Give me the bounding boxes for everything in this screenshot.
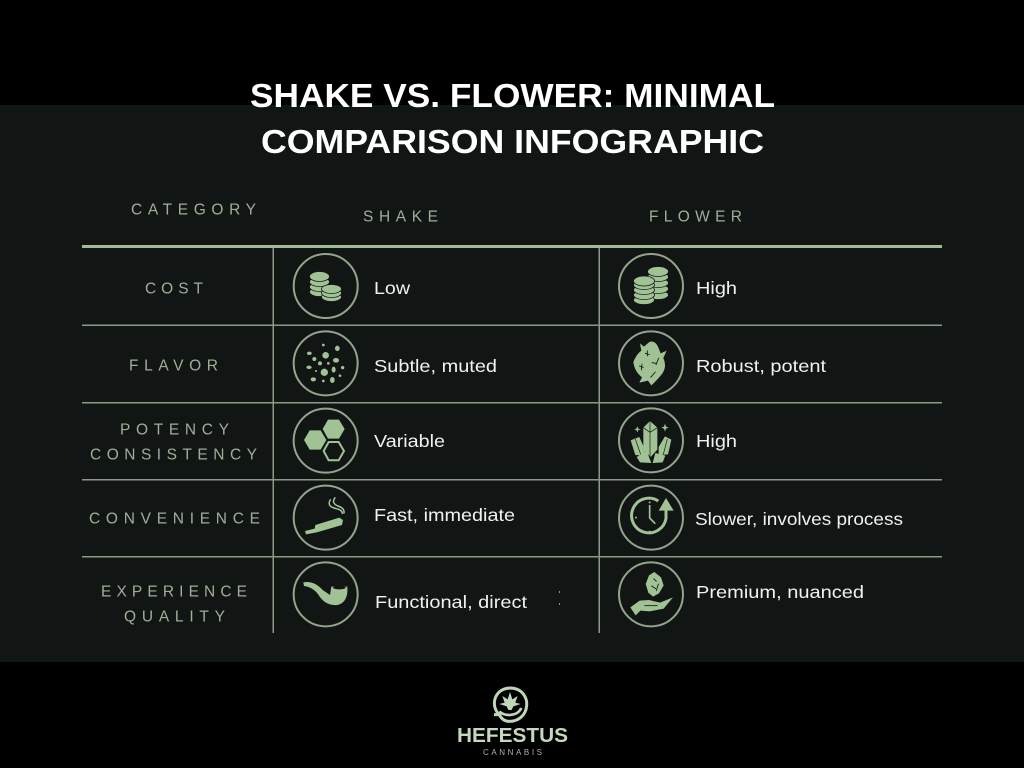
row labels: COST	[145, 280, 204, 298]
icon: small coin stacks	[294, 254, 358, 318]
shake values: Subtle, muted	[374, 356, 497, 376]
icon: scattered shake particles	[294, 331, 358, 395]
table header: CATEGORY	[131, 202, 256, 218]
stray marks	[559, 591, 560, 605]
table header	[131, 202, 742, 226]
icon: clock with up arrow	[619, 486, 683, 550]
shake values: Functional, direct	[375, 592, 527, 612]
icon: hand holding bud	[619, 562, 683, 626]
row labels: CONSISTENCY	[90, 446, 257, 464]
flower values	[695, 278, 903, 602]
table header: FLOWER	[649, 208, 742, 226]
title: COMPARISON INFOGRAPHIC	[261, 123, 764, 160]
shake values: Fast, immediate	[374, 505, 515, 525]
icon: tobacco pipe	[294, 562, 358, 626]
row labels: EXPERIENCE	[101, 584, 247, 600]
row labels: QUALITY	[124, 608, 225, 626]
logo: Hefestus Cannabis: HEFESTUS	[457, 725, 568, 747]
row labels: POTENCY	[120, 422, 229, 438]
shake values: Variable	[374, 431, 445, 451]
icon: flower bud	[619, 331, 683, 395]
row labels: FLAVOR	[129, 358, 218, 374]
title	[250, 77, 775, 160]
icon: joint with smoke	[294, 486, 358, 550]
flower values: Robust, potent	[696, 356, 826, 376]
flower values: High	[696, 431, 737, 451]
logo: Hefestus Cannabis: CANNABIS	[483, 748, 542, 757]
icon: large coin stacks	[619, 254, 683, 318]
row labels	[89, 280, 260, 626]
shake values: Low	[374, 278, 410, 298]
flower values: Premium, nuanced	[696, 582, 864, 602]
flower values: High	[696, 278, 737, 298]
table grid	[82, 245, 942, 633]
icon: crystals	[619, 408, 683, 472]
flower values: Slower, involves process	[695, 509, 903, 529]
row labels: CONVENIENCE	[89, 510, 260, 528]
logo: Hefestus Cannabis	[457, 688, 568, 757]
shake values	[374, 278, 527, 612]
title: SHAKE VS. FLOWER: MINIMAL	[250, 77, 775, 114]
panel: comparison background	[0, 105, 1024, 662]
icon: hexagons	[294, 409, 358, 473]
table header: SHAKE	[363, 208, 438, 226]
